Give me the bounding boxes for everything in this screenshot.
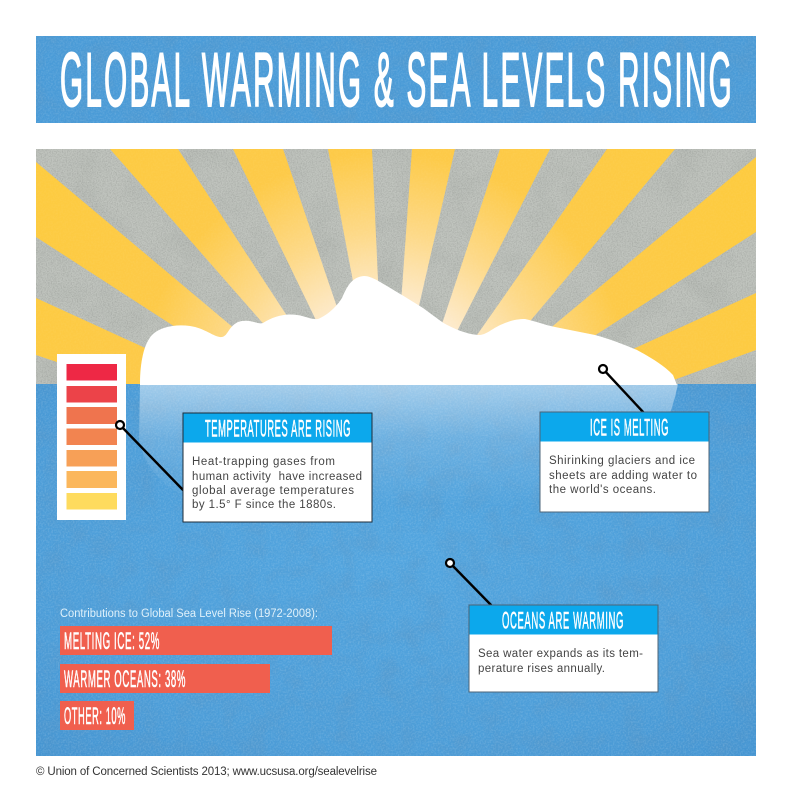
callout body: Heat-trapping gases from	[192, 456, 335, 468]
callout body: global average temperatures	[192, 485, 354, 497]
bar chart: contributions to sea level rise	[60, 608, 332, 730]
callout body: sheets are adding water to	[549, 470, 697, 482]
leader line: oceans	[446, 559, 492, 606]
leader line: temperatures	[116, 421, 184, 491]
bar: melting ice: MELTING ICE: 52%	[64, 628, 160, 655]
bar: warmer oceans: WARMER OCEANS: 38%	[64, 666, 186, 693]
callout body	[549, 455, 697, 496]
callout body	[192, 456, 362, 511]
thermometer panel	[57, 354, 126, 520]
callout body: human activity have increased	[192, 471, 362, 483]
callout body: Sea water expands as its tem-	[478, 648, 643, 660]
footer credit: © Union of Concerned Scientists 2013; www.ucsusa.org/sealevelrise	[36, 766, 377, 778]
callout: ice is melting: ICE IS MELTING	[590, 414, 669, 442]
callout body: the world's oceans.	[549, 484, 656, 496]
scene: sky with sun rays	[36, 149, 756, 410]
callout body: perature rises annually.	[478, 663, 605, 675]
ray texture	[36, 149, 756, 385]
bar: warmer oceans	[60, 664, 270, 693]
chart heading: Contributions to Global Sea Level Rise (1972-2008):	[60, 608, 318, 620]
callout: oceans are warming	[469, 605, 658, 692]
scene: ocean	[36, 384, 756, 756]
callout body: by 1.5° F since the 1880s.	[192, 499, 336, 511]
callout: ice is melting	[540, 412, 709, 512]
callout body: Shirinking glaciers and ice	[549, 455, 695, 467]
title banner	[36, 36, 756, 123]
leader line: ice	[599, 365, 644, 413]
text: TEMPERATURES ARE RISING	[205, 416, 351, 442]
bar: other	[60, 701, 134, 730]
callout body	[478, 648, 643, 675]
iceberg	[140, 276, 677, 385]
bar chart: contributions to sea level rise: OTHER: 10%	[64, 703, 126, 730]
callout: temperatures are rising	[183, 413, 372, 522]
sun rays	[36, 149, 756, 410]
submerged iceberg	[139, 384, 678, 485]
temperature level bars	[66, 364, 117, 510]
